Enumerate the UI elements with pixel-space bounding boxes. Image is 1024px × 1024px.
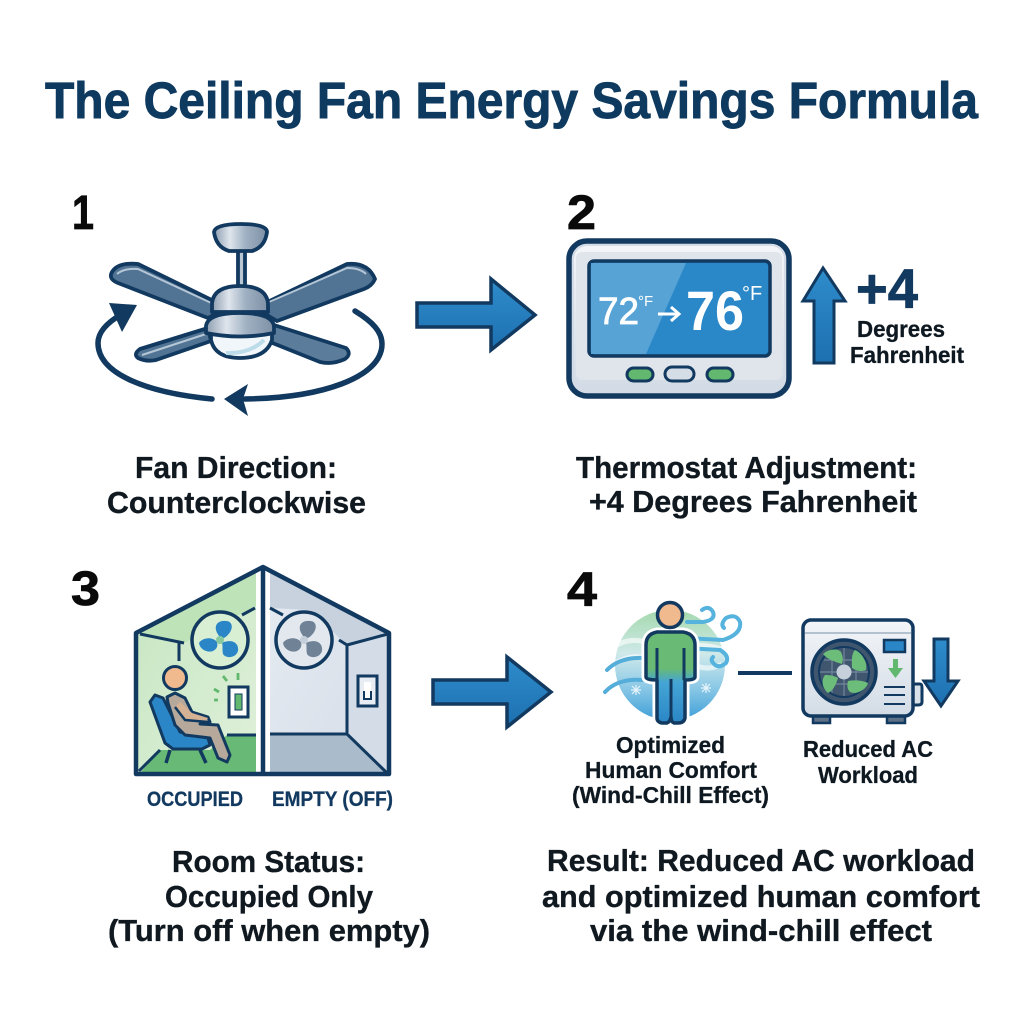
callout: plus 4 degrees: Fahrenheit (850, 342, 964, 368)
thermostat display reading: °F (742, 283, 762, 305)
wind curls (685, 608, 740, 666)
callout: plus 4 degrees: Degrees (857, 316, 945, 342)
icon: counterclockwise rotation arrows (98, 303, 382, 416)
label: reduced AC workload: Reduced AC (803, 736, 933, 762)
step number 3: 3 (71, 563, 100, 616)
icon: up arrow (803, 268, 845, 363)
AC fan blades (823, 650, 868, 693)
label: optimized human comfort: Human Comfort (585, 757, 757, 783)
caption: fan direction: Fan Direction: (135, 450, 337, 485)
seated person on chair (150, 666, 230, 763)
AC fan grill (819, 647, 869, 697)
icon: thermostat (569, 241, 789, 396)
thermostat display reading: 72 (598, 291, 639, 333)
step number 1: 1 (72, 187, 94, 240)
label: optimized human comfort: (Wind-Chill Effect) (572, 782, 769, 808)
icon: AC outdoor unit (803, 620, 922, 723)
caption: result: and optimized human comfort (542, 879, 980, 914)
caption: thermostat adjustment: +4 Degrees Fahrenheit (589, 484, 917, 519)
icon: occupied room (137, 572, 256, 773)
panel: step 1 fan direction (72, 187, 382, 520)
caption: room status (108, 844, 430, 948)
step number 2: 2 (567, 187, 596, 240)
label: optimized human comfort (572, 732, 769, 808)
thermostat display reading: °F (638, 293, 653, 310)
icon: down arrow (924, 639, 958, 706)
house outline (136, 567, 389, 774)
connector line (738, 671, 792, 675)
frost marks (631, 683, 711, 695)
light switch on (214, 673, 248, 717)
step number 4: 4 (567, 564, 597, 617)
occupied room ceiling fan (192, 612, 248, 668)
panel: step 2 thermostat (567, 187, 964, 519)
label: reduced AC workload (803, 736, 933, 788)
light switch off (358, 676, 377, 706)
caption: result: Result: Reduced AC workload (547, 843, 975, 878)
caption: room status: Room Status: (172, 844, 365, 879)
label: empty off: EMPTY (OFF) (272, 788, 393, 811)
callout: plus 4 degrees: +4 (856, 257, 918, 320)
title: The Ceiling Fan Energy Savings Formula (45, 72, 979, 129)
figure (646, 632, 695, 723)
icon: person with wind-chill effect (605, 602, 740, 723)
panel: step 4 result (542, 564, 980, 948)
label: optimized human comfort: Optimized (616, 732, 725, 758)
caption: fan direction (107, 450, 366, 520)
callout: plus 4 degrees (850, 257, 964, 368)
panel: step 3 room status (71, 563, 430, 948)
caption: result: via the wind-chill effect (590, 913, 932, 948)
thermostat display reading: 76 (686, 279, 744, 342)
caption: thermostat adjustment (576, 450, 917, 519)
icon: empty room (270, 572, 389, 773)
caption: fan direction: Counterclockwise (107, 485, 366, 520)
label: reduced AC workload: Workload (818, 762, 918, 788)
caption: room status: (Turn off when empty) (108, 913, 430, 948)
empty room ceiling fan (276, 612, 332, 668)
thermostat display reading (598, 279, 762, 342)
label: occupied: OCCUPIED (147, 788, 243, 811)
arrow: step 1 to step 2 (417, 279, 535, 350)
caption: room status: Occupied Only (165, 879, 374, 914)
caption: result (542, 843, 980, 948)
icon: ceiling fan (111, 224, 375, 363)
arrow: step 3 to step 4 (433, 657, 551, 727)
caption: thermostat adjustment: Thermostat Adjustment: (576, 450, 917, 485)
